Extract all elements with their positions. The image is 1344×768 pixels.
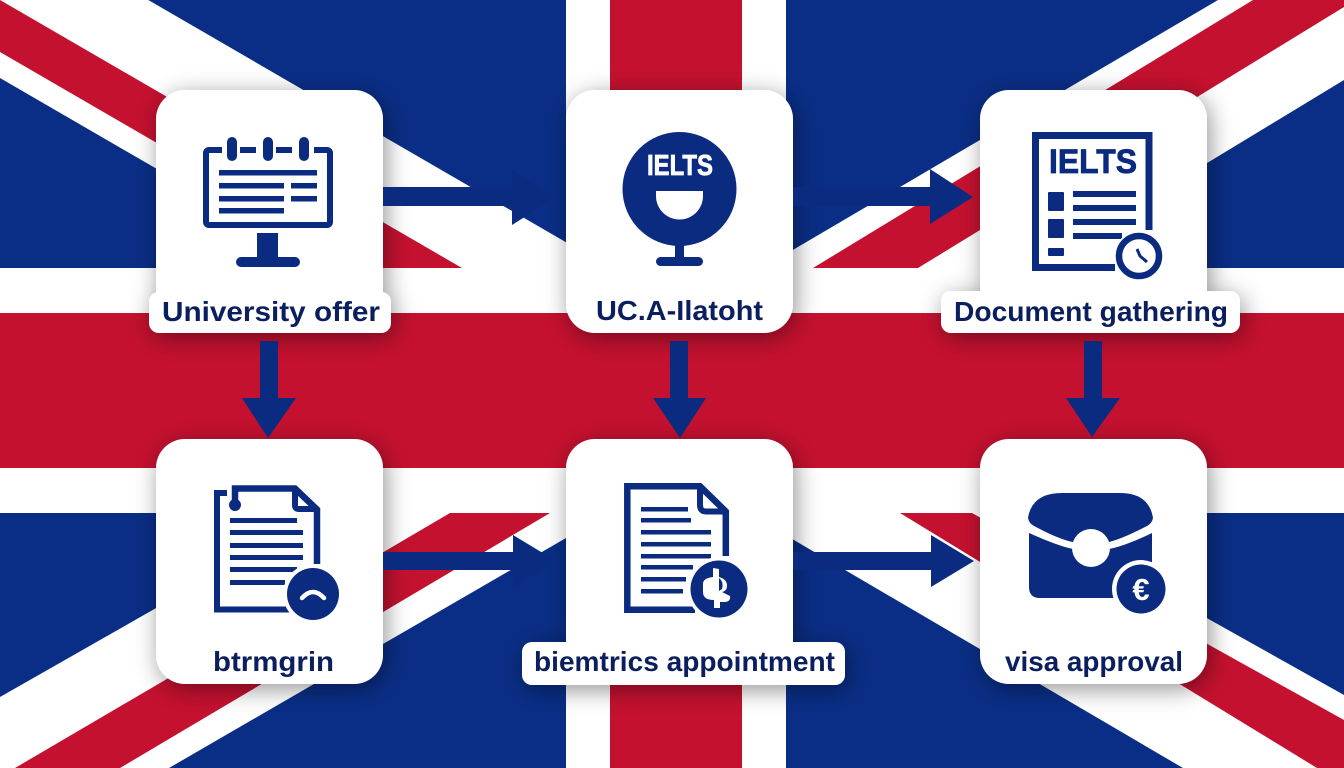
icon: IELTS document with clock	[1036, 136, 1164, 281]
card	[941, 90, 1240, 333]
arrow: btrmgrin to biemtrics appointment	[383, 535, 556, 587]
icon: envelope with euro badge: €	[1132, 572, 1150, 607]
panel: University offer	[149, 90, 391, 333]
icon: IELTS speaking microphone: IELTS	[647, 150, 713, 182]
panel: biemtrics appointment	[522, 439, 845, 685]
label: UC.A-Ilatoht	[596, 295, 763, 326]
arrow: University offer to UC.A-Ilatoht	[383, 170, 556, 225]
panel: visa approval	[980, 439, 1207, 684]
card	[566, 90, 793, 333]
arrow: biemtrics appointment to visa approval	[793, 535, 974, 587]
arrow: University offer to btrmgrin	[242, 341, 296, 438]
arrow: UC.A-Ilatoht to biemtrics appointment	[653, 341, 706, 438]
label: Document gathering	[954, 296, 1228, 327]
icon: document with badge	[627, 486, 751, 621]
panel: Document gathering	[941, 90, 1240, 333]
label: visa approval	[1005, 646, 1183, 677]
icon: calendar on monitor	[206, 137, 330, 267]
icon: envelope with euro badge	[1028, 493, 1170, 618]
icon: IELTS document with clock: IELTS	[1049, 143, 1137, 181]
card	[156, 439, 383, 684]
card	[522, 439, 845, 685]
card	[149, 90, 391, 333]
arrow: UC.A-Ilatoht to Document gathering	[793, 169, 973, 224]
panel: UC.A-Ilatoht	[566, 90, 793, 333]
card	[980, 439, 1207, 684]
icon: IELTS speaking microphone	[622, 132, 736, 266]
label: biemtrics appointment	[534, 646, 835, 677]
label: University offer	[162, 296, 380, 327]
label: btrmgrin	[213, 646, 334, 677]
arrow: Document gathering to visa approval	[1066, 341, 1120, 437]
panel: btrmgrin	[156, 439, 383, 684]
icon: document with badge	[217, 488, 343, 624]
